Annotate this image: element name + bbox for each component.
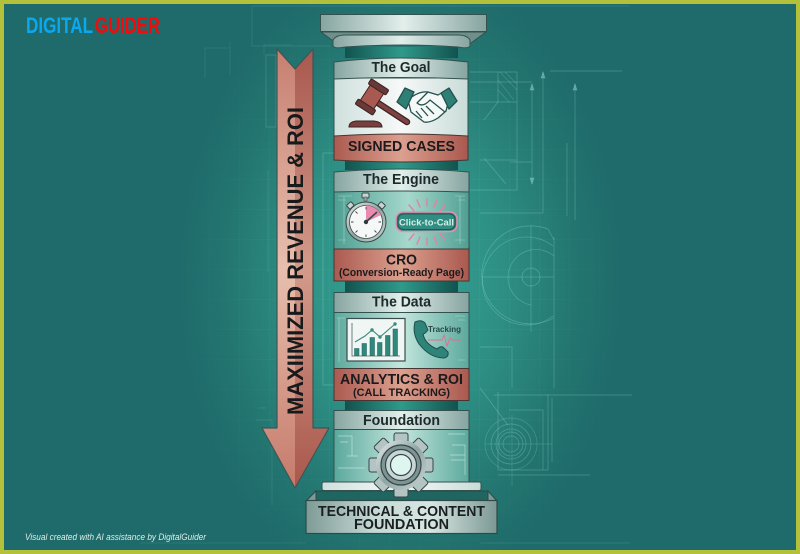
icon: handshake [397,88,457,122]
panel: the data [334,292,469,369]
arrow: maximized revenue and ROI [262,49,329,488]
logo: GUIDER [95,13,160,38]
credit note: Visual created with AI assistance by DigitalGuider [25,532,207,542]
label: technical and content foundation: TECHNICAL & CONTENT [318,503,485,520]
panel: the engine [334,169,469,250]
label: CRO: CRO [386,252,417,268]
panel: the goal [334,58,468,136]
label: technical and content foundation: FOUNDATION [354,516,449,533]
label: signed cases: SIGNED CASES [348,138,455,155]
label: technical and content foundation [318,503,485,533]
icon: stopwatch [346,193,386,242]
label: analytics and ROI: (CALL TRACKING) [353,387,450,399]
blueprint line drawings [140,6,632,543]
heading: the data: The Data [372,294,432,310]
heading: the goal: The Goal [372,60,430,76]
icon: click-to-call button: Click-to-Call [399,218,454,228]
arrow: maximized revenue and ROI: MAXIIMIZED REVENUE & ROI [283,107,308,415]
base slab [322,482,481,490]
label: CRO [334,249,469,281]
icon: gavel [349,79,407,127]
label: analytics and ROI [334,368,469,400]
icon: phone handset tracking: Tracking [428,324,461,334]
icon: gear [369,433,433,497]
pillar capital [320,14,486,58]
heading: the engine: The Engine [363,171,439,188]
logo [26,13,160,38]
icon: bar chart [347,318,405,361]
pillar necks between sections [345,161,458,411]
label: signed cases [334,134,468,162]
pillar base [306,491,497,534]
panel: foundation [334,410,469,485]
heading: foundation: Foundation [363,413,440,429]
label: CRO: (Conversion-Ready Page) [339,267,464,279]
logo: DIGITAL [26,13,93,38]
label: analytics and ROI: ANALYTICS & ROI [340,371,463,388]
